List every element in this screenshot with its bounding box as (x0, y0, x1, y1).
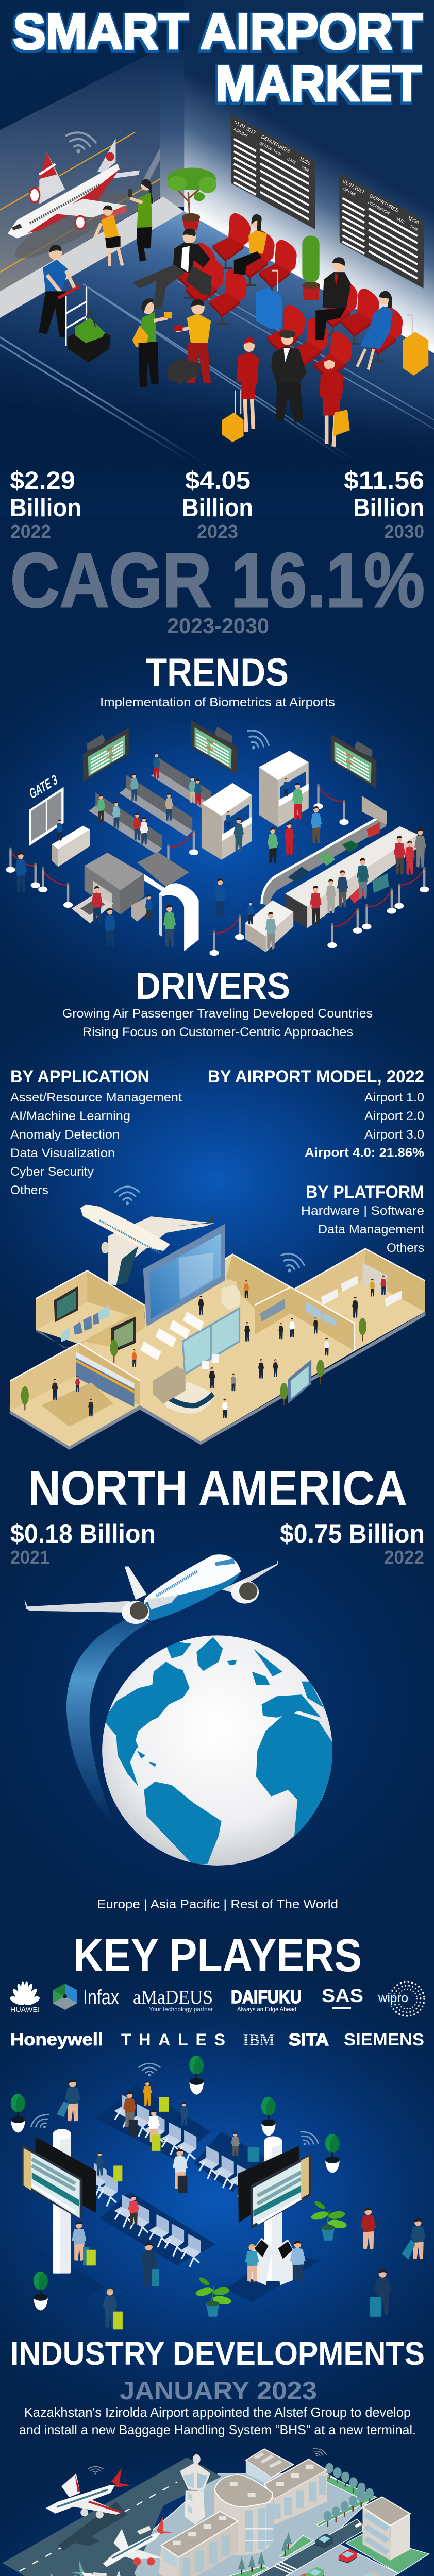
person: boy in orange (95, 205, 122, 266)
seating rows (177, 213, 403, 386)
security scanner (85, 853, 144, 914)
segment: by application: Cyber Security (10, 1165, 94, 1179)
ground vehicles (93, 2526, 151, 2576)
person: bearded man (315, 257, 351, 340)
segment: by platform (301, 1182, 424, 1255)
floor (0, 211, 434, 464)
segment: by airport model: Airport 1.0 (364, 1091, 424, 1105)
security arch (159, 883, 199, 951)
airplane (80, 1205, 214, 1285)
pillar right with board (238, 2136, 311, 2281)
stat: 2022 (10, 467, 81, 542)
flight board 1 (230, 114, 315, 229)
person: stewardess left (237, 337, 259, 432)
logo: amadeus: aMaDEUS (133, 1987, 213, 2008)
logo: infax: Infax (83, 1986, 119, 2009)
text: other regions: Europe | Asia Pacific | Rest of The World (97, 1897, 338, 1911)
inner wall (255, 1287, 354, 1351)
flight board 2 (339, 173, 424, 289)
airplane middle (103, 2517, 174, 2567)
luggage: yellow suitcase (403, 315, 428, 376)
heading: title: MARKET (215, 55, 422, 112)
airplane (8, 139, 140, 269)
plant: topiary (302, 235, 320, 300)
parked cars (228, 2534, 379, 2576)
conveyor (72, 852, 189, 923)
kiosk left (202, 783, 252, 860)
gate door (27, 772, 64, 846)
airport illustration (2, 2447, 429, 2576)
segment: by platform: Others (387, 1241, 424, 1255)
stat: 2030: $11.56 (344, 467, 424, 495)
plant: bonsai (167, 167, 216, 230)
terminal base (10, 1312, 425, 1450)
seats (140, 1312, 219, 1369)
stat: 2022: 2022 (10, 521, 51, 542)
globe illustration (24, 1554, 333, 1866)
pillar left with board (22, 2129, 96, 2274)
segment: by airport model: Airport 3.0 (364, 1128, 424, 1142)
logo: siemens: SIEMENS (344, 2030, 424, 2049)
segment: by application: Others (10, 1183, 48, 1197)
desk (52, 826, 90, 867)
heading: key players: KEY PLAYERS (73, 1930, 362, 1981)
segment: by platform: Hardware | Software (301, 1204, 424, 1218)
person: seated man in black (133, 229, 212, 309)
stanchions with ropes (6, 784, 429, 956)
segment: by airport model: BY AIRPORT MODEL, 2022 (208, 1067, 424, 1087)
glass partition (182, 1309, 240, 1374)
standing people (15, 778, 426, 950)
text: drivers list (62, 1007, 373, 1039)
logo: sita: SITA (289, 2030, 329, 2049)
airplane top (46, 2468, 131, 2519)
desks (321, 1276, 402, 1307)
segment: by airport model (208, 1067, 424, 1160)
stat: 2021: $0.18 Billion (10, 1519, 156, 1548)
logo: ibm: IBM (243, 2031, 275, 2049)
segment: by platform: Data Management (318, 1223, 424, 1236)
stat: CAGR period: 2023-2030 (167, 614, 269, 638)
logos row 2 (10, 2030, 424, 2049)
icon: wifi (115, 1187, 140, 1205)
person: woman with bag (132, 298, 172, 387)
small trees (21, 1318, 366, 1410)
stat: 2030: Billion (353, 494, 424, 522)
person: woman in blue dress (357, 291, 393, 370)
luggage: blue suitcase (256, 270, 282, 329)
icon: wifi (277, 1250, 306, 1277)
stat: 2022: 2022 (384, 1547, 424, 1568)
icon: wifi (242, 726, 271, 756)
ground plane (127, 2473, 371, 2576)
window sill (0, 197, 184, 318)
person: man at window cart (39, 245, 75, 337)
room: right (295, 1249, 425, 1351)
logo: infax (53, 1984, 119, 2010)
luggage: small yellow case (222, 391, 244, 442)
segment: by application: BY APPLICATION (10, 1067, 149, 1087)
segment: by platform: BY PLATFORM (306, 1182, 424, 1202)
person: pilot (271, 330, 307, 423)
stat: 2022: $2.29 (10, 467, 75, 495)
luggage on belt (288, 822, 389, 904)
stat: 2022: Billion (10, 494, 81, 522)
trends illustration: airport checkpoints (6, 720, 429, 956)
luggage: duffel (168, 358, 201, 384)
control tower (180, 2454, 210, 2524)
date: january 2023: JANUARY 2023 (120, 2377, 317, 2405)
gates (61, 1305, 109, 1342)
segment: by application: Asset/Resource Management (10, 1091, 182, 1105)
luggage cart (58, 286, 111, 362)
segment: by airport model: Airport 2.0 (364, 1109, 424, 1123)
person: stewardess right (320, 354, 350, 447)
icon: wifi (63, 130, 97, 157)
segment: by application: Data Visualization (10, 1146, 115, 1160)
wall (184, 0, 434, 353)
baggage carousel (245, 796, 418, 952)
airplane (24, 1554, 278, 1624)
tarmac (2, 2458, 222, 2576)
check-in kiosks (251, 2238, 293, 2285)
stat: 2023: 2023 (197, 521, 238, 542)
heading: drivers: DRIVERS (136, 965, 290, 1007)
text: development (19, 2404, 416, 2437)
trees (166, 2463, 374, 2576)
globe (102, 1635, 333, 1866)
baggage belt (153, 1366, 214, 1414)
floor shadows (11, 2084, 321, 2302)
hero illustration: airport waiting lounge (0, 0, 434, 464)
room: main hall (80, 1254, 354, 1442)
stat: 2023: $4.05 (185, 467, 251, 495)
airplane lower (69, 2560, 138, 2576)
seating rows (87, 2095, 249, 2267)
plants: topiaries (11, 2056, 340, 2311)
building upper right (264, 2459, 327, 2526)
logo: honeywell: Honeywell (10, 2030, 103, 2049)
person: man in yellow shirt (174, 299, 211, 383)
segment: by application (10, 1067, 182, 1197)
stat: 2021 (10, 1519, 156, 1568)
text: trend: Implementation of Biometrics at Airports (100, 696, 335, 709)
people (57, 2080, 426, 2329)
logo: huawei (9, 1981, 40, 2013)
flight boards (83, 720, 376, 789)
logo: amadeus: Your technology partner (149, 2006, 213, 2013)
person: seated woman in yellow (234, 214, 267, 275)
text: development: and install a new Baggage Handling System “BHS” at a new terminal. (19, 2422, 416, 2437)
stat: 2030: 2030 (384, 521, 424, 542)
text: drivers list: Growing Air Passenger Traveling Developed Countries (62, 1007, 373, 1021)
drivers illustration: terminal floor plan (10, 1187, 425, 1450)
logo: sas: SAS (322, 1985, 363, 2006)
building round centre (214, 2475, 273, 2555)
text: development: Kazakhstan's Izirolda Airport appointed the Alstef Group to develop (24, 2404, 411, 2420)
pillar (160, 50, 184, 207)
heading: title: SMART AIRPORT (13, 3, 423, 60)
kiosk right (259, 751, 309, 827)
segment: by airport model: Airport 4.0: 21.86% (305, 1146, 424, 1160)
heading: north america: NORTH AMERICA (28, 1461, 407, 1516)
grass (160, 2476, 429, 2576)
roof units (173, 2465, 313, 2545)
key players illustration: departure hall (11, 2056, 426, 2329)
heading: title (13, 3, 423, 112)
logo: thales: THALES (121, 2030, 225, 2049)
logos row 1 (9, 1981, 424, 2016)
building right (362, 2497, 410, 2561)
seating rows (89, 757, 211, 854)
floor stripes (0, 275, 434, 464)
road (173, 2519, 362, 2576)
flight trail (66, 1616, 149, 1829)
kiosk (222, 1285, 240, 1310)
entrance door (288, 1360, 311, 1404)
tiny passengers (52, 1276, 387, 1418)
logo: wipro (378, 1982, 424, 2016)
seated passengers (97, 753, 202, 845)
stat: 2021: 2021 (10, 1547, 49, 1568)
stat: 2022: $0.75 Billion (280, 1519, 425, 1548)
text: drivers list: Rising Focus on Customer-Centric Approaches (82, 1025, 353, 1039)
main window screen (143, 1224, 225, 1327)
building back (246, 2449, 293, 2486)
room: upper left (36, 1270, 144, 1344)
parking lot (242, 2544, 398, 2576)
window (0, 49, 160, 291)
logo: daifuku: DAIFUKU (231, 1987, 302, 2007)
stat: 2023 (182, 467, 253, 542)
stat: 2030 (344, 467, 424, 542)
person: woman photographing (128, 179, 153, 262)
room: lower left (10, 1343, 140, 1447)
icons: wifi (88, 2447, 328, 2474)
icons: wifi (29, 2063, 321, 2151)
stat: 2023: Billion (182, 494, 253, 522)
gate door: GATE 3 (27, 772, 60, 802)
logo: wipro: wipro (378, 1991, 408, 2005)
building low left (159, 2512, 238, 2576)
logo: huawei: HUAWEI (10, 2006, 40, 2013)
plants: potted leaves (195, 2200, 347, 2317)
logo: daifuku (231, 1987, 302, 2013)
segment: by application: Anomaly Detection (10, 1128, 120, 1142)
helicopter (51, 2574, 76, 2576)
logo: daifuku: Always an Edge Ahead (237, 2006, 296, 2013)
stat: 2022 (280, 1519, 425, 1568)
segment: by application: AI/Machine Learning (10, 1109, 130, 1123)
heading: trends: TRENDS (146, 651, 289, 694)
